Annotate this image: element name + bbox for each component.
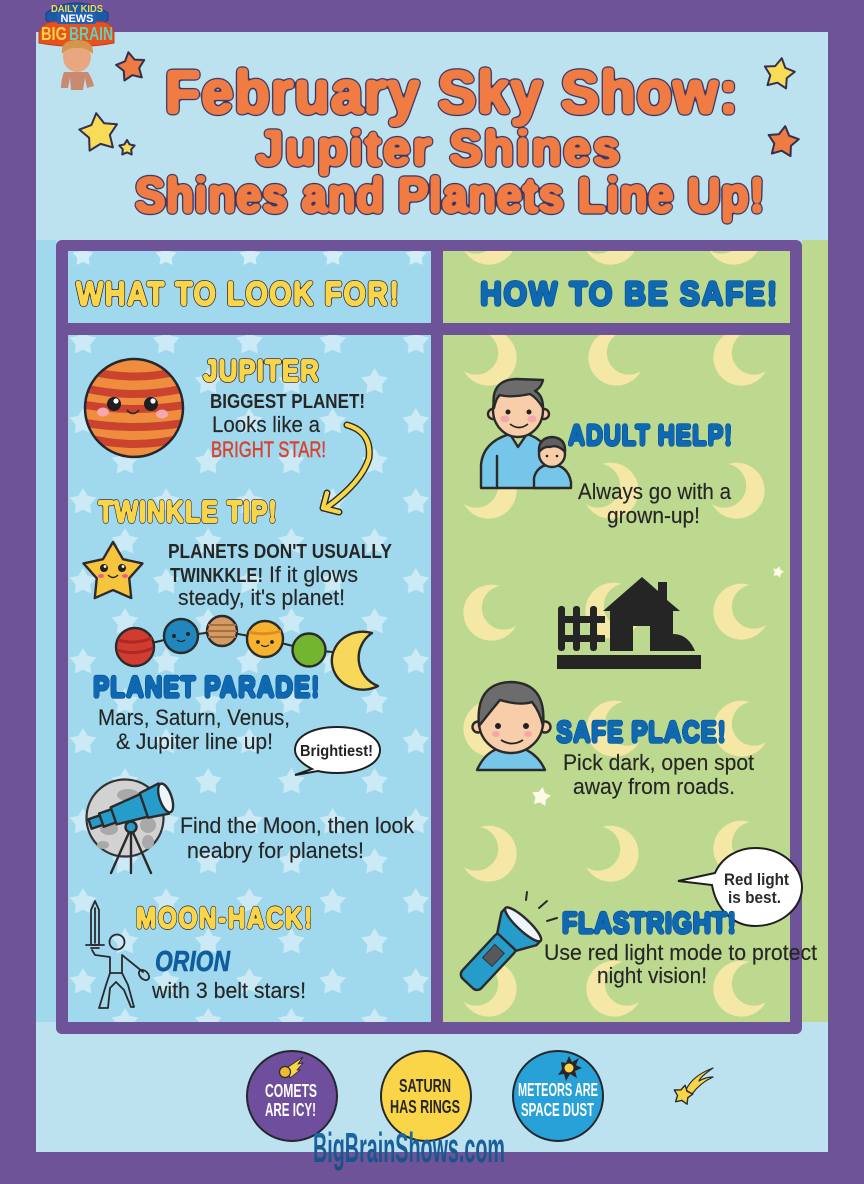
- callout: brightest: [295, 727, 380, 775]
- callout: brightest: Brightiest!: [300, 743, 373, 760]
- text: BigBrainShows.com: [313, 1124, 505, 1171]
- callout: red light: [678, 848, 802, 926]
- heading: Moon-hack: MOON-HACK!: [136, 901, 312, 935]
- text: Jupiter facts: BRIGHT STAR!: [211, 437, 326, 462]
- text: belt stars: with 3 belt stars!: [151, 978, 306, 1003]
- icon: sparkle star: [771, 565, 785, 578]
- text: twinkle tip: PLANETS DON'T USUALLY: [168, 541, 393, 563]
- text: planet parade: & Jupiter line up!: [116, 729, 273, 754]
- text: adult help: grown-up!: [607, 503, 700, 528]
- panel: how to be safe: [443, 330, 817, 1022]
- text: find the moon: [180, 813, 415, 863]
- heading: Orion: ORION: [155, 946, 231, 978]
- heading: Safe place: SAFE PLACE!: [556, 715, 726, 749]
- header: what to look for: [68, 245, 431, 323]
- text: twinkle tip: steady, it's planet!: [178, 585, 345, 610]
- icon: moon and telescope: [85, 780, 177, 873]
- text: find the moon: Find the Moon, then look: [180, 813, 415, 838]
- badge: meteors: [513, 1051, 603, 1141]
- badge: meteors: SPACE DUST: [521, 1100, 594, 1120]
- icon: Jupiter: [80, 359, 190, 460]
- logo: DAILY KIDS: [51, 4, 103, 15]
- logo: BRAIN: [69, 24, 113, 44]
- text: Jupiter facts: [210, 391, 365, 462]
- text: safe place: away from roads.: [573, 774, 735, 799]
- text: twinkle tip: [168, 541, 393, 610]
- heading: Adult help: ADULT HELP!: [568, 419, 732, 452]
- text: flashlight: Use red light mode to protect: [544, 940, 817, 965]
- header: how to be safe: [443, 251, 790, 323]
- icon: house and fence: [557, 577, 701, 669]
- text: safe place: [563, 750, 754, 799]
- text: adult help: Always go with a: [578, 479, 732, 504]
- heading: Twinkle tip: TWINKLE TIP!: [98, 495, 277, 530]
- icon: smiling star: [84, 542, 142, 598]
- title: [135, 60, 765, 223]
- icon: sparkle star: [530, 786, 552, 807]
- left side strip: [36, 240, 56, 1022]
- callout: red light: Red light: [724, 870, 789, 889]
- text: Jupiter facts: BIGGEST PLANET!: [210, 391, 365, 413]
- text: flashlight: [544, 940, 817, 988]
- text: Jupiter facts: Looks like a: [212, 412, 321, 437]
- text: twinkle tip: If it glows: [269, 562, 358, 587]
- text: find the moon: neabry for planets!: [187, 838, 364, 863]
- icon: adult and child: [481, 379, 571, 488]
- callout: red light: is best.: [728, 888, 781, 907]
- header: what to look for: WHAT TO LOOK FOR!: [76, 275, 399, 312]
- text: planet parade: [98, 705, 290, 754]
- badge: saturn: HAS RINGS: [390, 1097, 460, 1117]
- arrow: [323, 425, 369, 512]
- badge: comets: ARE ICY!: [265, 1100, 316, 1120]
- panel: what to look for: [68, 335, 431, 1022]
- header: how to be safe: HOW TO BE SAFE!: [480, 275, 777, 312]
- icon: child: [472, 682, 550, 770]
- heading: Jupiter: JUPITER: [203, 354, 319, 389]
- logo: BIG: [41, 24, 67, 44]
- text: safe place: Pick dark, open spot: [563, 750, 754, 775]
- badge: comets: COMETS: [265, 1081, 317, 1101]
- title: February Sky Show:: [165, 60, 738, 126]
- badge: saturn: SATURN: [399, 1076, 451, 1096]
- text: flashlight: night vision!: [597, 963, 707, 988]
- icon: Orion figure: [86, 901, 151, 1008]
- right side strip: [802, 240, 828, 1022]
- main frame: [56, 240, 802, 1034]
- chart: planet parade line-up: [116, 616, 378, 690]
- text: planet parade: Mars, Saturn, Venus,: [98, 705, 290, 730]
- text: adult help: [578, 479, 732, 528]
- badge: meteors: METEORS ARE: [518, 1080, 598, 1100]
- badge: saturn: [381, 1051, 471, 1141]
- title: Shines and Planets Line Up!: [135, 169, 765, 223]
- icon: flashlight: [450, 892, 557, 1000]
- heading: Planet parade: PLANET PARADE!: [93, 670, 319, 704]
- logo: NEWS: [60, 13, 94, 25]
- text: twinkle tip: TWINKKLE!: [170, 565, 263, 587]
- title stars: [77, 50, 800, 157]
- heading: Flastright: FLASTRIGHT!: [562, 906, 736, 939]
- title: Jupiter Shines: [256, 122, 620, 176]
- logo: [39, 3, 114, 90]
- icon: shooting star: [672, 1068, 713, 1105]
- badge: comets: [247, 1051, 337, 1141]
